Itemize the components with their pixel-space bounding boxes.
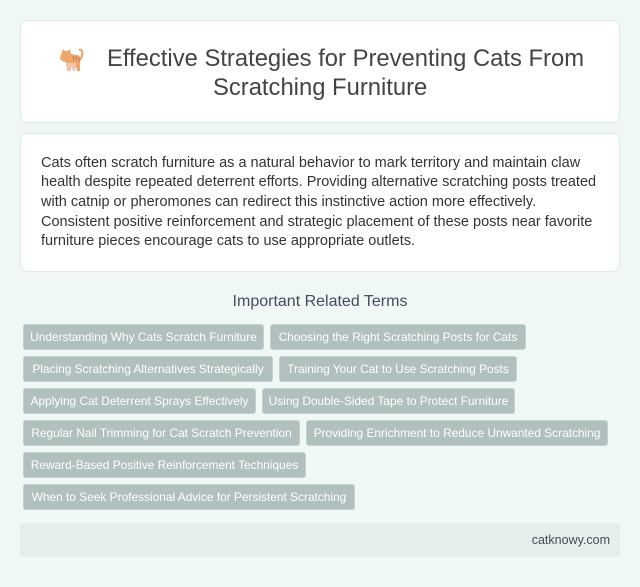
tag: Applying Cat Deterrent Sprays Effectively	[31, 394, 248, 408]
title line 1: Effective Strategies for Preventing Cats From	[107, 45, 584, 72]
panel: related term tags	[23, 324, 608, 510]
tag	[23, 388, 256, 414]
tag	[262, 388, 515, 414]
tag: Reward-Based Positive Reinforcement Techniques	[31, 458, 298, 472]
tag	[270, 324, 526, 350]
description text: Cats often scratch furniture as a natural behavior to mark territory and maintain claw	[41, 155, 580, 171]
panel: title card	[20, 20, 620, 123]
panel: description card	[20, 133, 620, 272]
tag	[23, 324, 264, 350]
tag: Training Your Cat to Use Scratching Posts	[287, 362, 509, 376]
tag: Choosing the Right Scratching Posts for Cats	[279, 330, 517, 344]
description text: Consistent positive reinforcement and strategic placement of these posts near favorite	[41, 214, 592, 230]
heading: related terms: Important Related Terms	[233, 293, 407, 310]
footer source: catknowy.com	[532, 533, 610, 547]
tag: Placing Scratching Alternatives Strategically	[32, 362, 264, 376]
tag	[23, 484, 355, 510]
tag	[23, 420, 300, 446]
title line 2: Scratching Furniture	[213, 74, 427, 101]
icon: cat	[60, 48, 84, 71]
tag	[279, 356, 517, 382]
description text	[41, 155, 596, 249]
tag	[23, 452, 306, 478]
tag: Regular Nail Trimming for Cat Scratch Prevention	[31, 426, 292, 440]
footer bar	[20, 523, 620, 557]
description text: with catnip or pheromones can redirect this instinctive action more effectively.	[41, 194, 536, 210]
tag: Providing Enrichment to Reduce Unwanted Scratching	[314, 426, 600, 440]
tag: Understanding Why Cats Scratch Furniture	[30, 330, 257, 344]
tag	[306, 420, 608, 446]
tag: Using Double-Sided Tape to Protect Furniture	[269, 394, 508, 408]
tag: When to Seek Professional Advice for Persistent Scratching	[32, 490, 346, 504]
tag	[23, 356, 273, 382]
description text: health despite repeated deterrent efforts. Providing alternative scratching posts treated	[41, 174, 596, 190]
description text: furniture pieces encourage cats to use appropriate outlets.	[41, 233, 415, 249]
